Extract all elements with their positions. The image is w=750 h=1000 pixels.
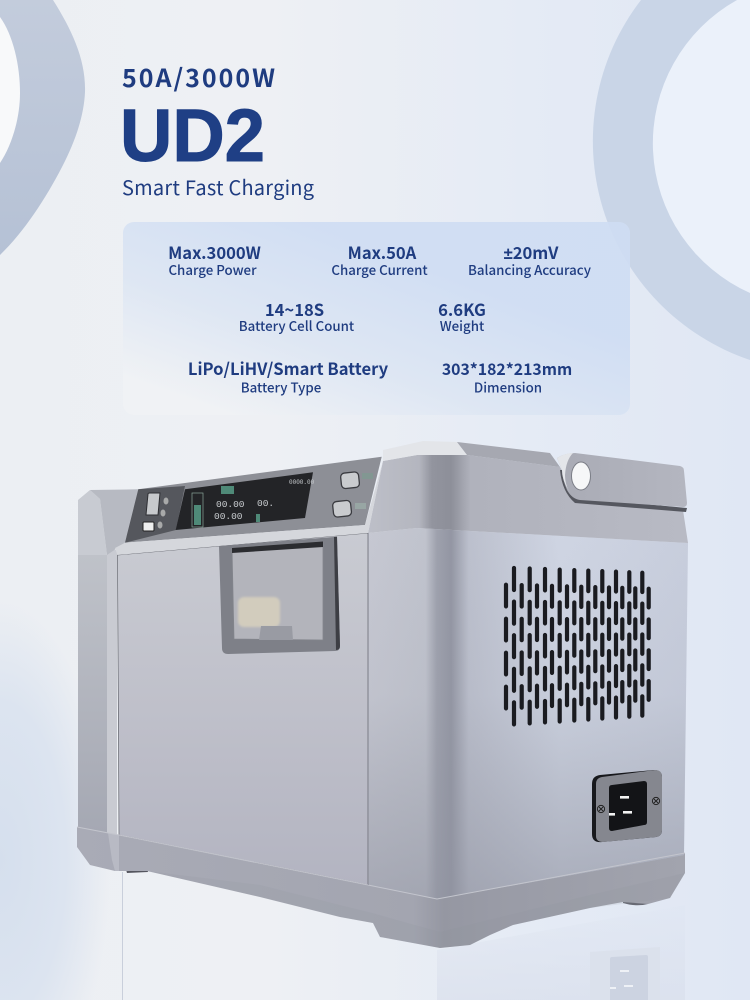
spec: battery type bbox=[188, 356, 389, 396]
carry handle bbox=[557, 453, 687, 512]
top band bbox=[368, 455, 688, 543]
spec: charge power: Charge Power bbox=[168, 260, 257, 279]
spec: dimension: Dimension bbox=[474, 378, 542, 396]
spec: charge current: Charge Current bbox=[331, 260, 428, 279]
hatch cover bbox=[219, 537, 340, 654]
spec: charge current: Max.50A bbox=[348, 240, 417, 264]
base tray bbox=[77, 827, 685, 948]
panel lip bbox=[115, 461, 383, 555]
subtitle: Smart Fast Charging bbox=[122, 172, 314, 201]
ventilation slots bbox=[506, 568, 649, 724]
side buttons bbox=[332, 472, 373, 517]
floor reflection bbox=[122, 872, 685, 1000]
hatch tab bbox=[259, 626, 293, 640]
handle latch light bbox=[572, 462, 590, 490]
hatch label bbox=[238, 597, 280, 627]
power button on control panel bbox=[143, 493, 168, 531]
model name: UD2 bbox=[120, 94, 265, 177]
power rating: 50A/3000W bbox=[122, 59, 275, 95]
feet bbox=[125, 866, 648, 905]
screen readouts: 00. bbox=[257, 498, 274, 509]
dark left control section bbox=[125, 486, 185, 543]
display screen bbox=[176, 472, 315, 530]
spec: weight: 6.6KG bbox=[438, 297, 486, 321]
screen readouts: 00.00 bbox=[214, 511, 243, 522]
spec: charge current bbox=[331, 240, 428, 279]
spec: battery cell count bbox=[239, 297, 355, 335]
control panel bbox=[125, 457, 382, 543]
left column bbox=[78, 555, 107, 833]
title block bbox=[120, 59, 314, 201]
left shoulder bbox=[78, 489, 138, 555]
spec: balancing accuracy bbox=[468, 240, 592, 279]
spec: dimension bbox=[442, 357, 572, 396]
left ring decoration bbox=[0, 0, 85, 255]
spec: charge power bbox=[168, 240, 261, 279]
power socket bbox=[592, 770, 662, 842]
product: charger unit bbox=[77, 441, 688, 948]
spec: battery type: LiPo/LiHV/Smart Battery bbox=[188, 356, 389, 380]
right side face bbox=[368, 528, 688, 899]
spec: charge power: Max.3000W bbox=[168, 240, 261, 264]
side seam bbox=[368, 533, 370, 885]
spec: dimension: 303*182*213mm bbox=[442, 357, 572, 380]
reflected power socket bbox=[590, 947, 660, 1000]
lid top bbox=[383, 441, 560, 467]
spec: weight: Weight bbox=[440, 316, 485, 335]
spec: balancing accuracy: Balancing Accuracy bbox=[468, 260, 592, 279]
base seam highlight bbox=[77, 827, 685, 899]
spec: weight bbox=[438, 297, 486, 335]
light strip bbox=[107, 550, 117, 835]
screen readouts: 0000.00 bbox=[289, 479, 315, 486]
screws bbox=[597, 797, 660, 813]
screen readouts bbox=[214, 479, 315, 522]
spec: balancing accuracy: ±20mV bbox=[504, 240, 559, 264]
spec panel bbox=[123, 222, 630, 415]
spec: battery cell count: Battery Cell Count bbox=[239, 316, 355, 335]
spec: battery cell count: 14~18S bbox=[265, 297, 324, 321]
battery indicator bbox=[192, 486, 260, 527]
spec: battery type: Battery Type bbox=[241, 378, 321, 396]
right ring decoration bbox=[593, 0, 750, 360]
screen readouts: 00.00 bbox=[216, 499, 245, 510]
front plate bbox=[118, 533, 368, 885]
